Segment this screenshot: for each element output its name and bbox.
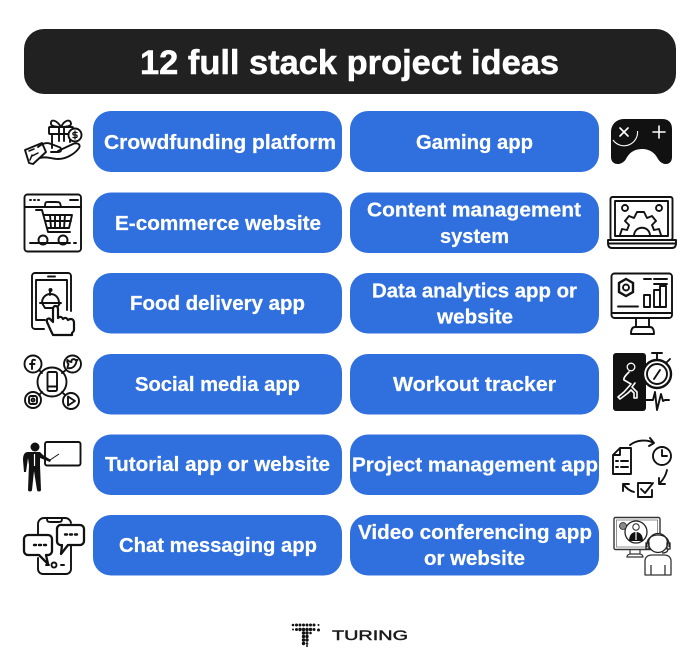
card: Social media app	[93, 354, 342, 414]
Turing logo: TURING	[332, 627, 408, 643]
card: Project management app: Project management app	[352, 454, 598, 476]
title banner: 12 full stack project ideas	[140, 44, 559, 82]
card: Chat messaging app	[93, 515, 342, 576]
icon: presenter at board	[23, 442, 80, 492]
icon: tablet with food cloche and pointing hand	[32, 273, 74, 335]
title banner	[24, 29, 676, 94]
card: Content management system: system	[440, 225, 509, 248]
icon: hand holding gift and coin	[25, 121, 82, 164]
card: Data analytics app or website: website	[436, 306, 513, 328]
card: Content management system	[350, 192, 599, 253]
icon: phone workout tracker with stopwatch	[613, 353, 671, 411]
card: Gaming app	[350, 111, 599, 172]
card: Chat messaging app: Chat messaging app	[119, 534, 317, 557]
icon: video conference with headset user	[614, 518, 671, 575]
icon: monitor with analytics dashboard	[612, 274, 672, 334]
Turing logo	[292, 624, 408, 647]
card: Food delivery app: Food delivery app	[130, 292, 305, 315]
card: Crowdfunding platform	[93, 111, 342, 172]
card: Tutorial app or website: Tutorial app or website	[105, 453, 330, 476]
card: Workout tracker: Workout tracker	[393, 373, 556, 396]
card: Content management system: Content management	[367, 198, 581, 222]
card: Data analytics app or website: Data analytics app or	[372, 280, 577, 302]
icon: game controller	[611, 119, 672, 164]
icon: laptop with gear	[608, 197, 676, 248]
icon: phone with chat bubbles	[24, 518, 84, 574]
card: Video conferencing app or website	[350, 515, 599, 576]
card: Food delivery app	[93, 273, 342, 334]
card: E-commerce website	[93, 192, 342, 253]
card: E-commerce website: E-commerce website	[115, 212, 321, 235]
card: Tutorial app or website	[93, 434, 342, 495]
card: Gaming app: Gaming app	[416, 131, 533, 154]
icon: project management cycle	[613, 438, 671, 497]
card: Crowdfunding platform: Crowdfunding platform	[104, 131, 336, 154]
card: Project management app	[350, 434, 599, 495]
icon: social media network around phone	[24, 356, 81, 409]
icon: browser window with shopping cart	[24, 194, 81, 252]
card: Social media app: Social media app	[135, 373, 300, 396]
card: Workout tracker	[350, 354, 599, 414]
card: Data analytics app or website	[350, 273, 599, 334]
card: Video conferencing app or website: or website	[424, 547, 525, 570]
card: Video conferencing app or website: Video conferencing app	[358, 521, 592, 544]
logo mark: dotted T	[292, 624, 320, 647]
